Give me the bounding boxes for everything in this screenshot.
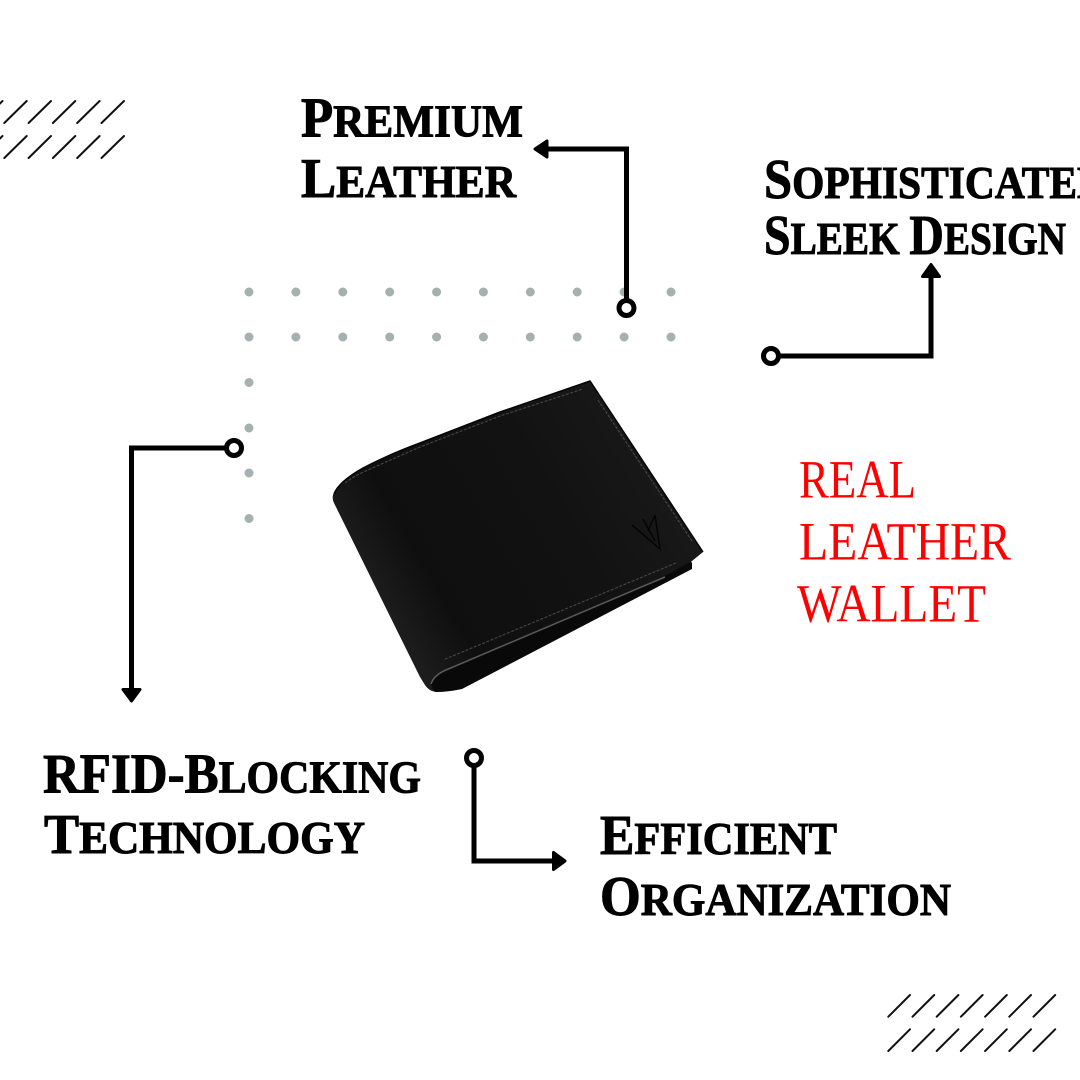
label: Real Leather Wallet: REAL xyxy=(799,450,916,510)
wallet stitching xyxy=(345,389,692,660)
arrow: to Sophisticated Sleek Design xyxy=(764,264,940,364)
label: Efficient Organization: EFFICIENT xyxy=(600,805,837,867)
label: RFID-Blocking Technology xyxy=(43,744,421,866)
label: Real Leather Wallet: LEATHER xyxy=(799,512,1011,572)
label: Premium Leather xyxy=(301,88,523,210)
label: Sophisticated Sleek Design: SLEEK DESIGN xyxy=(764,205,1066,267)
label: Premium Leather: LEATHER xyxy=(301,148,517,210)
label: Efficient Organization xyxy=(600,805,951,928)
arrow: to Premium Leather xyxy=(535,141,634,316)
wallet bottom edge highlight xyxy=(431,577,665,684)
wallet top edge xyxy=(334,381,703,552)
wallet pages underside xyxy=(425,560,692,692)
arrow: to Efficient Organization xyxy=(466,750,565,870)
wallet embossed logo xyxy=(632,515,660,549)
label: RFID-Blocking Technology: TECHNOLOGY xyxy=(44,804,365,866)
wallet photo xyxy=(333,381,703,692)
label: Sophisticated Sleek Design xyxy=(764,149,1080,267)
label: Real Leather Wallet xyxy=(797,450,1011,634)
dot grid xyxy=(244,288,676,523)
decorative hatch: bottom right xyxy=(888,995,1055,1051)
arrow: to RFID-Blocking Technology xyxy=(123,440,242,701)
decorative hatch: top left xyxy=(0,101,124,158)
label: Real Leather Wallet: WALLET xyxy=(797,574,986,634)
label: RFID-Blocking Technology: RFID-BLOCKING xyxy=(43,744,421,806)
label: Efficient Organization: ORGANIZATION xyxy=(600,866,951,928)
label: Premium Leather: PREMIUM xyxy=(301,88,523,150)
wallet body xyxy=(333,381,703,692)
